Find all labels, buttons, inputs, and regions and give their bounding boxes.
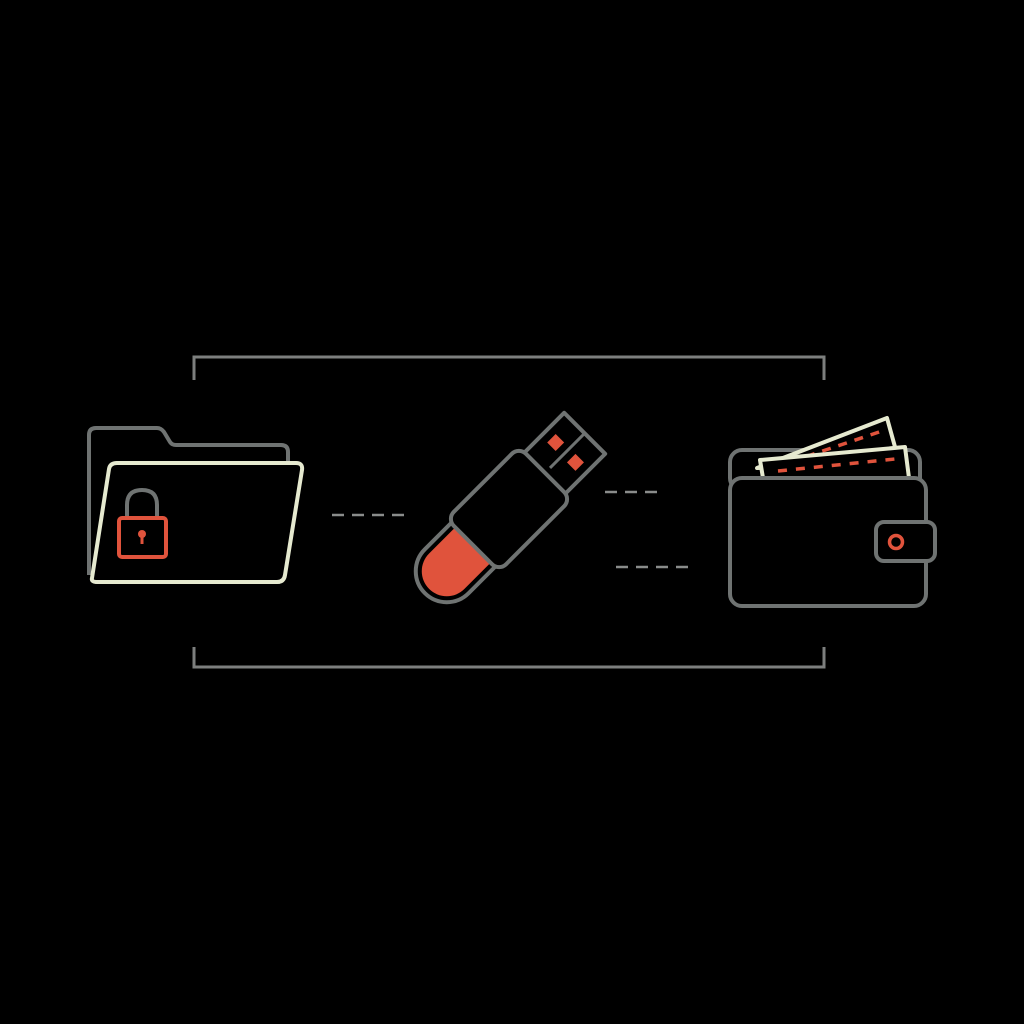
connector dashes right	[605, 492, 690, 567]
icon: USB drive	[399, 407, 611, 619]
icon: padlock	[119, 490, 166, 557]
icon: wallet	[730, 418, 935, 606]
bracket: top	[194, 357, 824, 380]
bills	[757, 418, 909, 478]
clasp	[876, 522, 935, 561]
icon: locked folder	[89, 428, 302, 582]
connector dashes left	[332, 514, 406, 516]
bracket: bottom	[194, 647, 824, 667]
cap	[403, 521, 497, 615]
